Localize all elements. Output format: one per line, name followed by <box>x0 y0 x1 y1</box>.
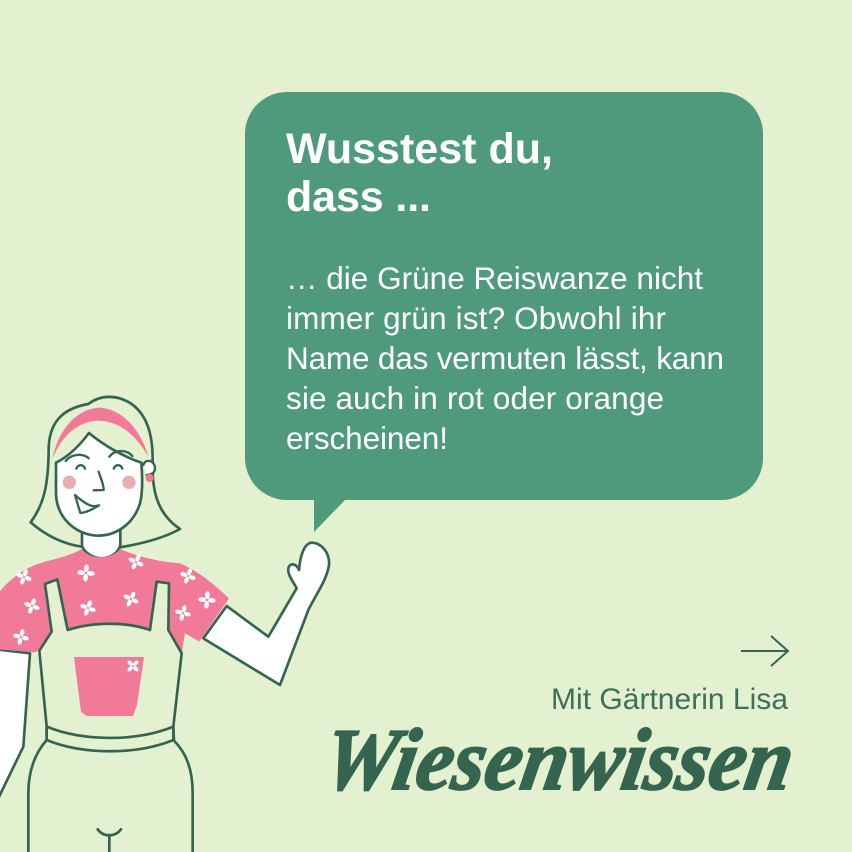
hair <box>31 397 180 547</box>
bib pocket <box>74 657 144 716</box>
logo wordmark: Wiesenwissen <box>316 712 802 809</box>
shirt flowers <box>11 551 216 676</box>
neck <box>82 530 120 558</box>
bubble body text: erscheinen! <box>286 420 448 456</box>
speech bubble <box>245 92 763 532</box>
facial features <box>66 451 155 513</box>
face <box>56 433 142 536</box>
bubble body text: … die Grüne Reiswanze nicht <box>286 260 703 296</box>
overalls <box>28 579 193 852</box>
bubble body text: sie auch in rot oder orange <box>286 380 664 416</box>
bubble body text: Name das vermuten lässt, kann <box>286 340 724 376</box>
arrow <box>741 636 788 666</box>
bubble body text: immer grün ist? Obwohl ihr <box>286 300 666 336</box>
cheeks and earring <box>63 474 154 489</box>
raised arm and hand <box>203 543 329 685</box>
bubble heading: Wusstest du, <box>286 125 553 173</box>
bubble heading: dass ... <box>286 173 431 221</box>
bubble body text <box>286 260 724 456</box>
bubble heading <box>286 125 553 221</box>
character: gardener Lisa <box>0 397 329 852</box>
headband <box>53 408 148 458</box>
subtitle: Mit Gärtnerin Lisa <box>551 683 788 716</box>
lower left arm <box>0 649 30 802</box>
shirt <box>0 549 229 653</box>
